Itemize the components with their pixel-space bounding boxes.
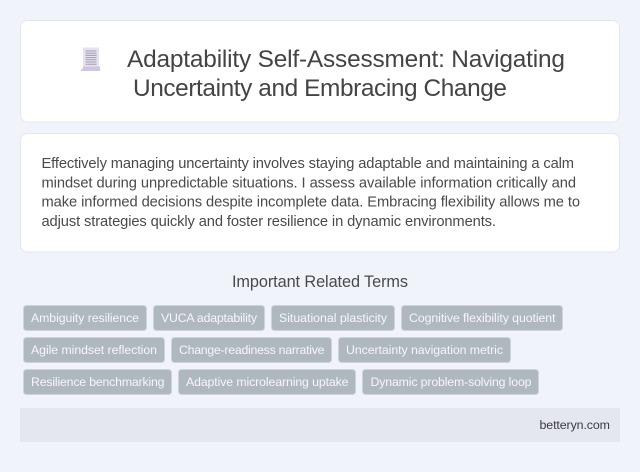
tag: vuca adaptability: VUCA adaptability	[161, 311, 258, 325]
tag: resilience benchmarking	[24, 370, 172, 394]
tag: situational plasticity	[272, 306, 394, 330]
description text: Effectively managing uncertainty involves staying adaptable and maintaining a calm	[42, 156, 574, 172]
tag: uncertainty navigation metric	[338, 338, 510, 362]
footer	[20, 408, 620, 442]
tag: cognitive flexibility quotient: Cognitive flexibility quotient	[409, 311, 556, 325]
title: Uncertainty and Embracing Change	[133, 75, 507, 102]
tag: vuca adaptability	[154, 306, 264, 330]
description text	[42, 156, 580, 230]
tag: adaptive microlearning uptake: Adaptive microlearning uptake	[186, 375, 349, 389]
tag: dynamic problem-solving loop	[362, 370, 538, 394]
tag: ambiguity resilience: Ambiguity resilience	[31, 311, 139, 325]
tag: ambiguity resilience	[24, 306, 146, 330]
icon: document scroll	[81, 48, 100, 71]
tag: agile mindset reflection	[24, 338, 164, 362]
title: Adaptability Self-Assessment: Navigating	[127, 46, 565, 73]
tag: cognitive flexibility quotient	[402, 306, 562, 330]
description text: adjust strategies quickly and foster resilience in dynamic environments.	[42, 214, 496, 230]
footer site name: betteryn.com	[540, 418, 610, 432]
tags: related terms	[24, 306, 562, 394]
header panel	[20, 20, 620, 122]
tag: dynamic problem-solving loop: Dynamic problem-solving loop	[370, 375, 532, 389]
tag: agile mindset reflection: Agile mindset reflection	[31, 343, 157, 357]
tag: adaptive microlearning uptake	[178, 370, 356, 394]
tag: situational plasticity: Situational plasticity	[279, 311, 388, 325]
description text: mindset during unpredictable situations. I assess available information critically and	[42, 175, 576, 191]
tag: change-readiness narrative	[172, 338, 332, 362]
heading: important related terms: Important Related Terms	[232, 273, 408, 291]
tag: uncertainty navigation metric: Uncertainty navigation metric	[346, 343, 503, 357]
tag: resilience benchmarking: Resilience benchmarking	[31, 375, 165, 389]
tag: change-readiness narrative: Change-readiness narrative	[179, 343, 325, 357]
description text: make informed decisions despite incomplete data. Embracing flexibility allows me to	[42, 195, 580, 211]
panel: description	[20, 134, 620, 252]
title	[127, 46, 565, 102]
